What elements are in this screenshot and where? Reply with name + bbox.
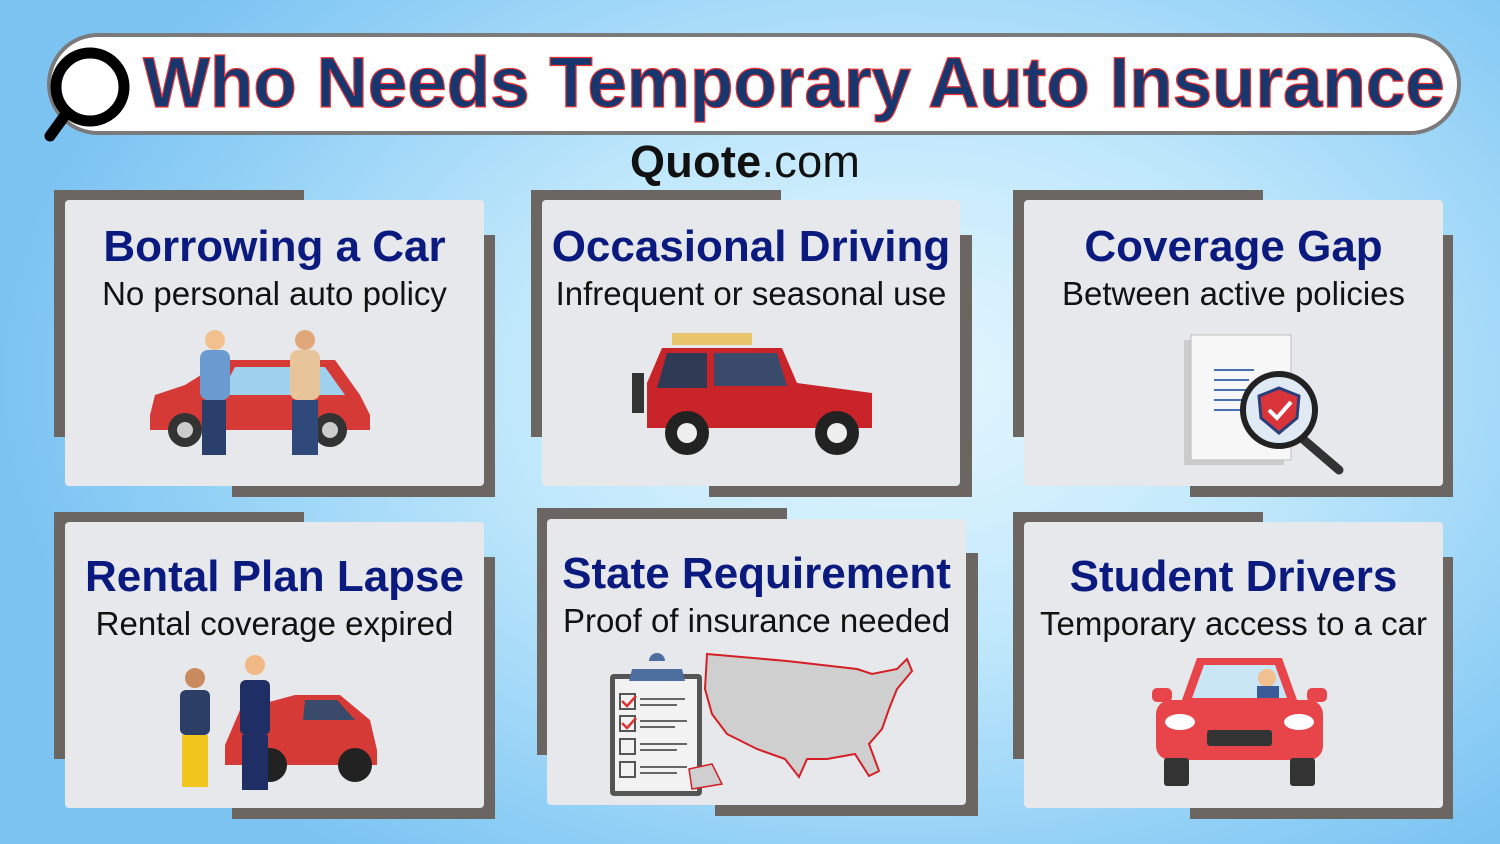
panel: student drivers [1024,522,1443,808]
panel: rental plan lapse [65,522,484,808]
icon: clipboard and US map [610,652,914,796]
panel: coverage gap: Coverage Gap [1084,222,1383,271]
panel: state requirement [547,519,966,805]
logo: Quote.com: Quote.com [630,136,860,187]
panel: occasional driving [542,200,960,486]
panel: occasional driving: Infrequent or seasonal use [556,275,946,312]
panel: occasional driving: Occasional Driving [552,222,950,271]
panel: rental plan lapse: Rental Plan Lapse [85,552,464,601]
panel: borrowing a car [65,200,484,486]
title text: Who Needs Temporary Auto Insurance [143,44,1445,123]
panel: coverage gap [1024,200,1443,486]
panel: coverage gap: Between active policies [1062,275,1405,312]
icon: document with shield magnifier [1184,334,1344,474]
icon: red car front view with driver [1152,658,1327,786]
panel: state requirement: Proof of insurance needed [563,602,950,639]
icon: rental agent, customer and car [180,655,377,790]
panel: student drivers: Student Drivers [1070,552,1397,601]
title bar [47,33,1461,135]
panel: state requirement: State Requirement [562,549,951,598]
icon: red car with two people [150,330,370,455]
panel: rental plan lapse: Rental coverage expired [96,605,453,642]
icon: red jeep [632,333,872,455]
icon: magnifier [44,48,130,142]
panel: borrowing a car: Borrowing a Car [103,222,446,271]
panel: student drivers: Temporary access to a car [1040,605,1427,642]
panel: borrowing a car: No personal auto policy [102,275,447,312]
